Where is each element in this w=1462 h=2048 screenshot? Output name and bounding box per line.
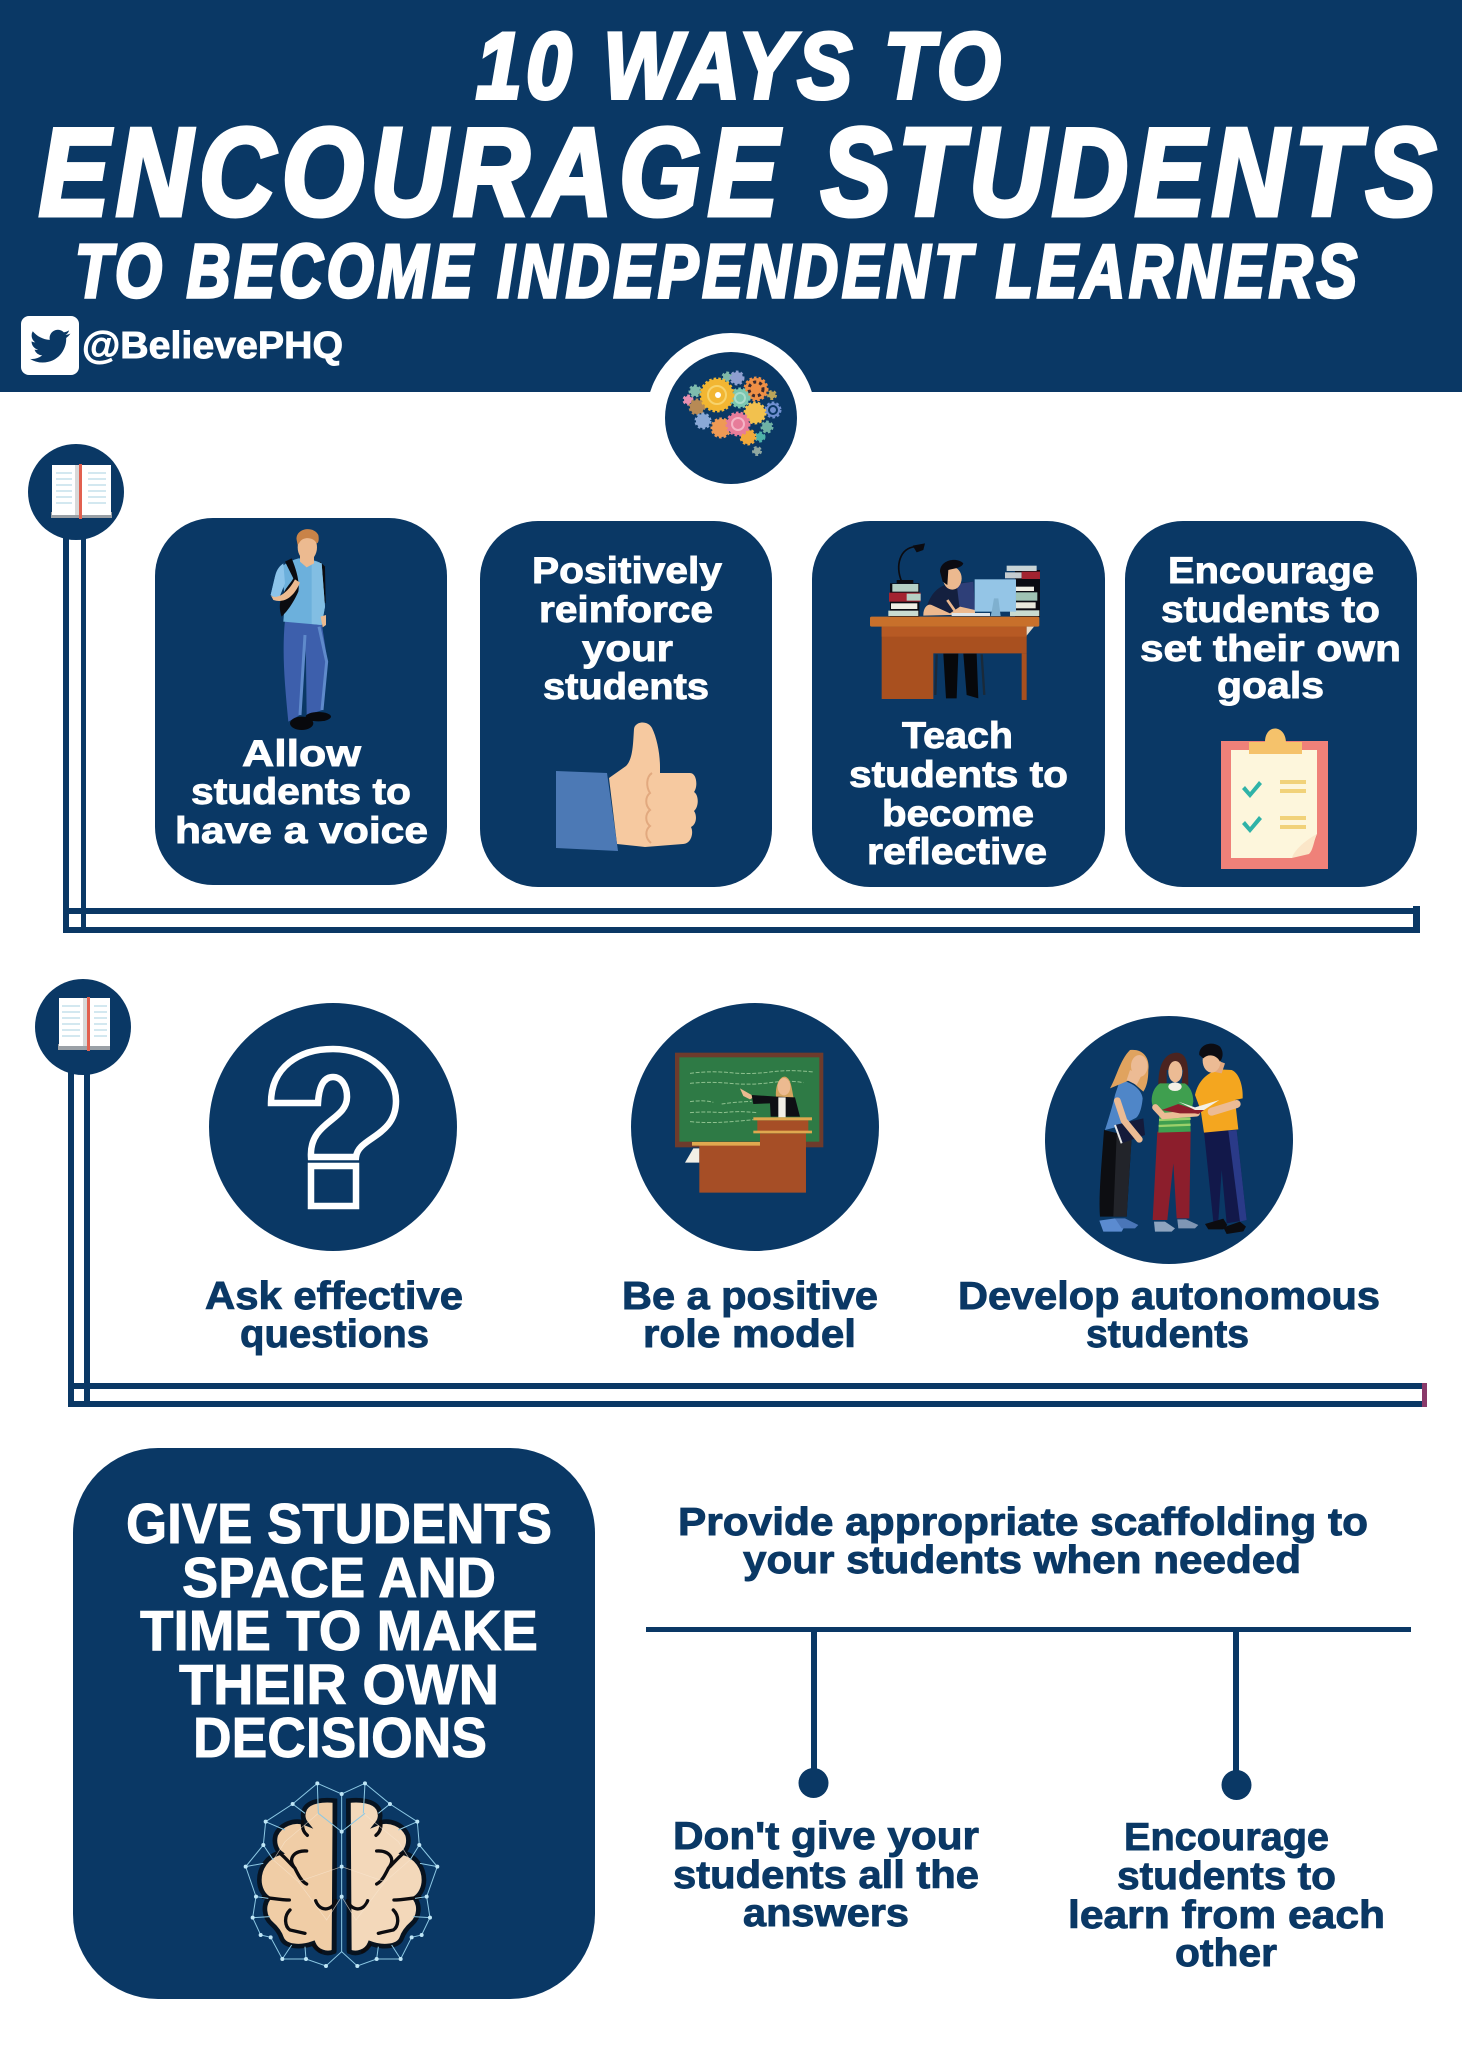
- right books: [1005, 566, 1040, 617]
- card caption: reinforce: [539, 589, 713, 630]
- text: encourage students to learn from each other: students to: [1117, 1855, 1336, 1898]
- panel heading: [126, 1492, 552, 1770]
- caption: role model: [643, 1313, 856, 1356]
- card caption: [175, 733, 428, 851]
- monitor: [975, 579, 1016, 612]
- desk: [882, 627, 1027, 699]
- card caption: Positively: [532, 550, 722, 591]
- left student: [1099, 1050, 1149, 1232]
- card caption: become: [882, 793, 1034, 834]
- text: encourage students to learn from each other: learn from each: [1068, 1894, 1385, 1937]
- panel heading: GIVE STUDENTS: [126, 1492, 552, 1556]
- text: provide appropriate scaffolding: [678, 1501, 1368, 1582]
- card caption: Teach: [902, 715, 1013, 756]
- illustration: student at desk: [870, 543, 1040, 700]
- caption: questions: [240, 1313, 429, 1356]
- text: provide appropriate scaffolding: your students when needed: [743, 1539, 1301, 1582]
- caption: Develop autonomous: [958, 1275, 1380, 1318]
- person legs: [935, 654, 984, 695]
- panel: teach students to become reflective: [812, 521, 1105, 887]
- icon: clipboard checklist: [1221, 728, 1328, 869]
- caption: [205, 1275, 463, 1356]
- card caption: set their own: [1140, 628, 1401, 669]
- right student: [1195, 1044, 1247, 1234]
- frame: section two connector: [68, 1060, 1427, 1407]
- caption: students: [1086, 1313, 1249, 1356]
- icon: brain with network: [244, 1781, 439, 1968]
- panel: positively reinforce your students: [480, 521, 772, 887]
- panel: develop autonomous students: [958, 1016, 1380, 1356]
- card caption: goals: [1217, 665, 1324, 706]
- panel: set their own goals: [1125, 521, 1417, 887]
- card caption: [849, 715, 1068, 872]
- icon: question mark: [271, 1049, 396, 1206]
- text: don't give your students all the answers: students all the: [673, 1854, 979, 1897]
- illustration: teacher at chalkboard: [675, 1053, 823, 1193]
- text: don't give your students all the answers: Don't give your: [673, 1815, 979, 1858]
- middle student: [1152, 1053, 1198, 1232]
- text: don't give your students all the answers: [673, 1815, 979, 1935]
- card caption: students: [543, 666, 709, 707]
- header banner: [0, 0, 1462, 392]
- person: [925, 582, 975, 615]
- illustration: three students reading: [1099, 1044, 1247, 1234]
- caption: Ask effective: [205, 1275, 463, 1318]
- card caption: Encourage: [1168, 550, 1374, 591]
- text: encourage students to learn from each other: other: [1175, 1932, 1277, 1975]
- card caption: students to: [191, 771, 411, 812]
- card caption: [1140, 550, 1401, 706]
- panel heading: DECISIONS: [193, 1706, 487, 1770]
- card caption: [532, 550, 722, 707]
- twitter handle: @BelievePHQ: [82, 325, 343, 367]
- card caption: students to: [849, 754, 1068, 795]
- text: don't give your students all the answers: answers: [743, 1892, 909, 1935]
- text: encourage students to learn from each other: [1068, 1816, 1385, 1975]
- text: provide appropriate scaffolding: Provide appropriate scaffolding to: [678, 1501, 1368, 1544]
- card caption: reflective: [867, 831, 1047, 872]
- icon: book badge one: [28, 444, 124, 540]
- caption: [958, 1275, 1380, 1356]
- left books: [888, 583, 921, 617]
- card caption: Allow: [242, 733, 361, 774]
- open book: [1162, 1100, 1219, 1114]
- diagram: scaffolding branch lines: [646, 1627, 1411, 1800]
- illustration: student with backpack: [271, 529, 331, 730]
- icon: twitter badge: [21, 316, 79, 375]
- caption: [622, 1275, 878, 1356]
- icon: book badge two: [35, 979, 131, 1075]
- icon: thumbs up: [556, 722, 698, 851]
- title line 1: 10 WAYS TO: [476, 13, 1005, 118]
- icon: gear brain badge: [646, 333, 816, 503]
- card caption: have a voice: [175, 810, 428, 851]
- text: encourage students to learn from each other: Encourage: [1124, 1816, 1329, 1859]
- panel heading: THEIR OWN: [179, 1653, 499, 1717]
- panel heading: TIME TO MAKE: [140, 1599, 538, 1663]
- panel: give students space and time: [73, 1448, 595, 1999]
- panel: allow students to have a voice: [155, 518, 447, 885]
- card caption: your: [582, 628, 673, 669]
- caption: Be a positive: [622, 1275, 878, 1318]
- panel heading: SPACE AND: [182, 1546, 496, 1610]
- frame: section one connector: [63, 530, 1420, 933]
- panel: be a positive role model: [622, 1003, 879, 1356]
- panel: ask effective questions: [205, 1003, 463, 1356]
- card caption: students to: [1161, 589, 1380, 630]
